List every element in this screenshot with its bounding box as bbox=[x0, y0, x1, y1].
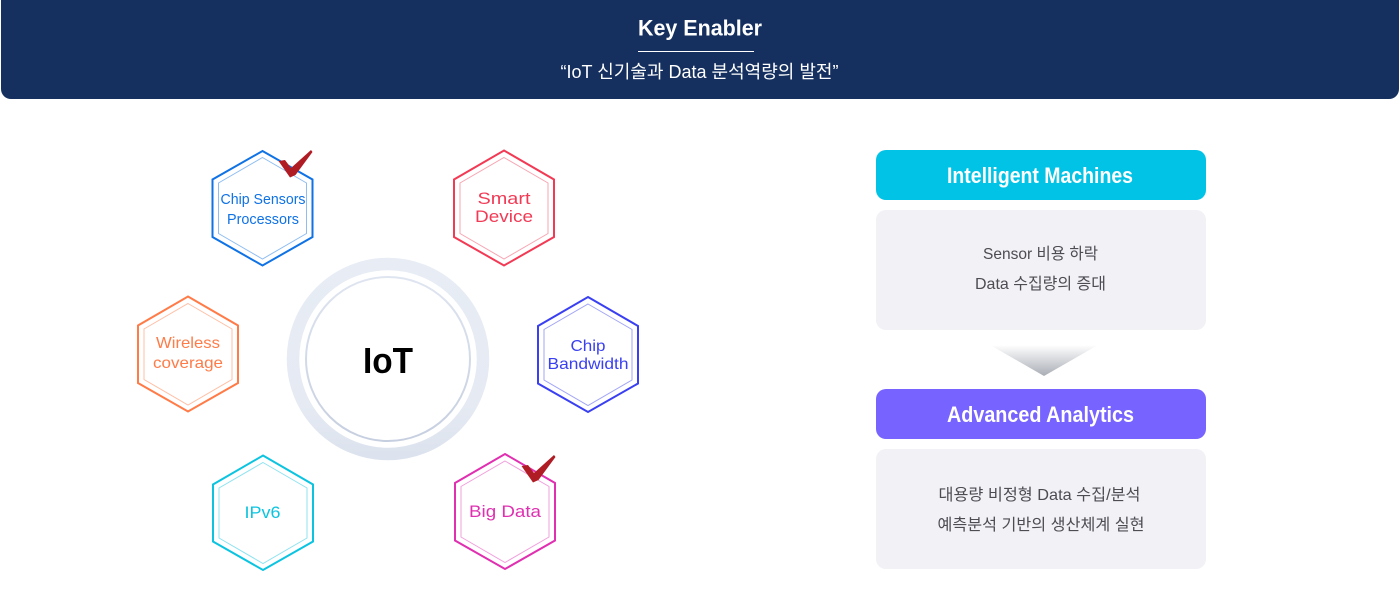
arrow: down bbox=[990, 345, 1098, 376]
panel: Intelligent Machines heading: Intelligent Machines bbox=[947, 163, 1133, 188]
hexagon: Chip Bandwidth: Chip bbox=[570, 338, 606, 355]
panel: Advanced Analytics description: 대용량 비정형 Data 수집/분석 bbox=[938, 486, 1140, 504]
panel: Intelligent Machines heading bbox=[876, 150, 1206, 200]
hexagon: Big Data bbox=[455, 454, 555, 569]
icon: check mark on Chip Sensors bbox=[278, 150, 312, 178]
panel: Intelligent Machines description bbox=[876, 210, 1206, 330]
hexagon: Smart Device: Device bbox=[475, 207, 533, 226]
panel: Advanced Analytics description: 예측분석 기반의 생산체계 실현 bbox=[938, 516, 1144, 534]
hexagon: Chip Sensors Processors: Processors bbox=[227, 211, 299, 228]
hexagon: IPv6 bbox=[213, 456, 313, 570]
central IoT circle bbox=[293, 264, 483, 454]
panel: Intelligent Machines description: Sensor 비용 하락 bbox=[983, 245, 1098, 263]
subheading: “IoT 신기술과 Data 분석역량의 발전” bbox=[560, 62, 839, 82]
hexagon: Wireless coverage: Wireless bbox=[156, 335, 220, 352]
icon: check mark on Big Data bbox=[522, 455, 556, 482]
panel: Advanced Analytics description bbox=[876, 449, 1206, 569]
hexagon: Chip Sensors Processors: Chip Sensors bbox=[220, 191, 306, 208]
hexagon: IPv6: IPv6 bbox=[244, 503, 280, 522]
hexagon: Big Data: Big Data bbox=[469, 502, 542, 521]
hexagon: Wireless coverage bbox=[138, 296, 238, 412]
header banner bbox=[1, 0, 1399, 99]
panel: Intelligent Machines description: Data 수집량의 증대 bbox=[975, 275, 1106, 293]
central IoT circle: IoT bbox=[363, 340, 413, 381]
hexagon: Chip Sensors Processors bbox=[212, 151, 312, 266]
heading: Key Enabler: Key Enabler bbox=[638, 16, 762, 40]
hexagon: Chip Bandwidth bbox=[538, 297, 638, 412]
hexagon: Wireless coverage: coverage bbox=[153, 355, 223, 372]
hexagon: Smart Device bbox=[454, 150, 554, 266]
hexagon: Chip Bandwidth: Bandwidth bbox=[548, 356, 628, 373]
hexagon: Smart Device: Smart bbox=[478, 189, 531, 208]
panel: Advanced Analytics heading bbox=[876, 389, 1206, 439]
panel: Advanced Analytics heading: Advanced Analytics bbox=[947, 402, 1134, 427]
